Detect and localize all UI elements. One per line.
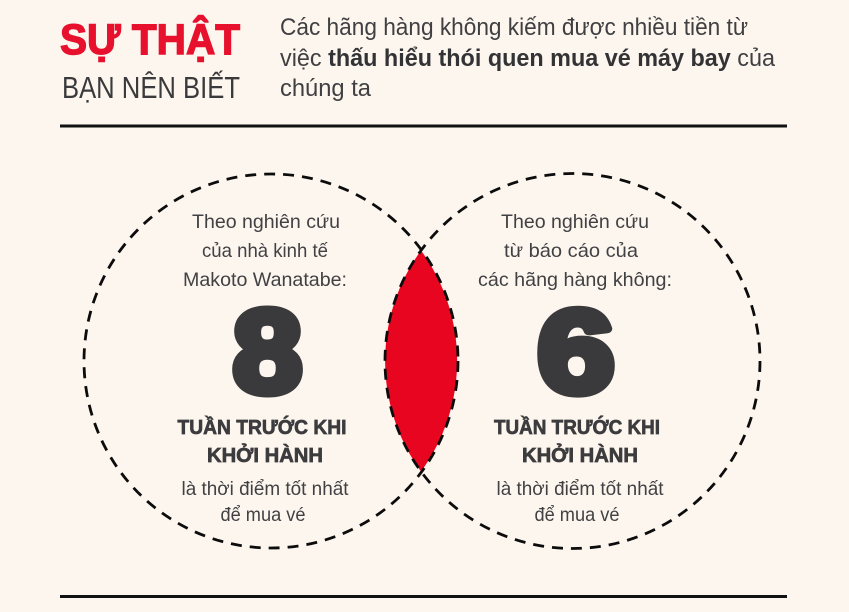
right weeks label: TUẦN TRƯỚC KHI: [494, 415, 660, 439]
left weeks label: TUẦN TRƯỚC KHI: [178, 415, 346, 439]
title: su that ban nen biet: [60, 15, 240, 105]
dashed circle right: [385, 174, 760, 548]
right weeks label: [494, 415, 660, 467]
right source text: Theo nghiên cứu: [501, 211, 649, 233]
left weeks label: [178, 415, 346, 467]
heading: su that: SỰ THẬT: [60, 15, 240, 64]
left caption: là thời điểm tốt nhất: [182, 478, 349, 500]
right caption: để mua vé: [534, 504, 620, 526]
number 8: 8: [233, 286, 302, 417]
number 6: 6: [538, 286, 614, 417]
right caption: [496, 478, 664, 526]
panel: right study: [478, 211, 672, 526]
left source text: [183, 211, 347, 291]
intro text: chúng ta: [280, 75, 372, 102]
right source text: [478, 211, 672, 291]
left caption: để mua vé: [220, 504, 306, 526]
left source text: Theo nghiên cứu: [192, 211, 340, 233]
left caption: [182, 478, 349, 526]
left weeks label: KHỞI HÀNH: [207, 443, 323, 467]
right weeks label: KHỞI HÀNH: [522, 443, 638, 467]
left source text: Makoto Wanatabe:: [183, 269, 347, 291]
left source text: của nhà kinh tế: [202, 240, 328, 262]
right source text: từ báo cáo của: [504, 240, 638, 262]
bottom divider: [60, 595, 787, 598]
red overlap lens: [385, 250, 457, 472]
top divider: [60, 124, 787, 128]
right source text: các hãng hàng không:: [478, 269, 672, 291]
intro text: Các hãng hàng không kiếm được nhiều tiền từ: [280, 14, 748, 41]
intro text: việc thấu hiểu thói quen mua vé máy bay của: [280, 45, 776, 72]
right caption: là thời điểm tốt nhất: [496, 478, 664, 500]
dashed circle left: [84, 174, 458, 548]
subheading: ban nen biet: BẠN NÊN BIẾT: [62, 70, 240, 105]
intro text: [280, 14, 776, 102]
panel: left study: [178, 211, 349, 526]
